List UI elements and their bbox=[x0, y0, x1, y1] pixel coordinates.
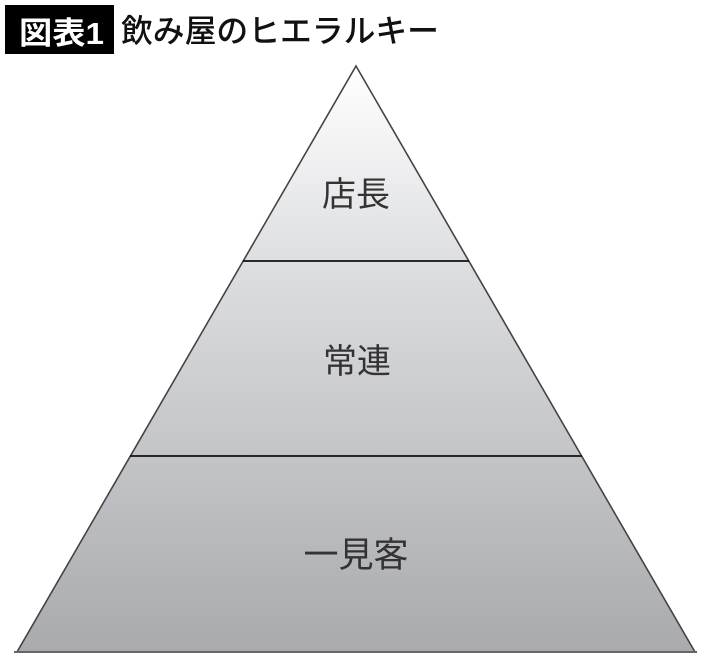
title text: 飲み屋のヒエラルキー bbox=[121, 13, 439, 49]
tier label: first-time customers: 一見客 bbox=[303, 536, 409, 575]
tier label: regulars: 常連 bbox=[323, 343, 391, 381]
title badge bbox=[5, 5, 114, 54]
title badge: 図表1 bbox=[19, 16, 104, 51]
tier label: store manager: 店長 bbox=[322, 176, 390, 214]
tier divider: middle bbox=[130, 455, 582, 457]
title bbox=[5, 5, 439, 54]
tier divider: top bbox=[243, 260, 469, 262]
pyramid base line bbox=[14, 651, 697, 653]
